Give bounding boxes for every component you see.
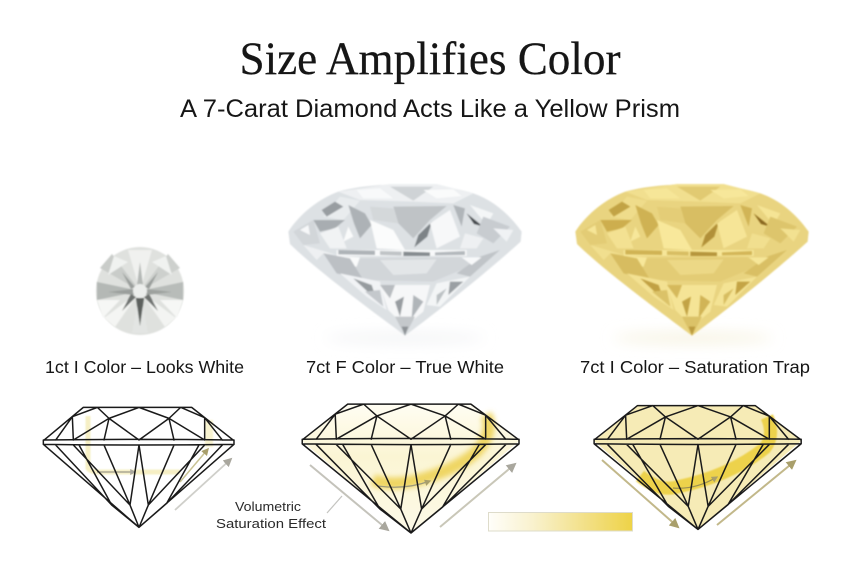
diamond photo: 1ct I color top view — [96, 247, 184, 335]
diagram: 1ct wireframe — [43, 407, 234, 527]
soft shadow: white diamond — [325, 333, 485, 343]
title: Size Amplifies Color — [240, 33, 621, 85]
diagram: 7ct F wireframe — [302, 404, 519, 534]
diamond photo: 7ct I color yellow — [575, 184, 809, 336]
callout: volumetric saturation effect: Volumetric — [235, 500, 301, 514]
diamond photo: 7ct F color — [288, 184, 522, 336]
color gradient bar — [488, 512, 632, 531]
subtitle: A 7-Carat Diamond Acts Like a Yellow Prism — [180, 95, 680, 123]
label: 1ct: 1ct I Color – Looks White — [45, 357, 244, 377]
soft shadow: yellow diamond — [613, 333, 773, 343]
label: 7ct I: 7ct I Color – Saturation Trap — [580, 357, 810, 377]
callout: volumetric saturation effect — [216, 500, 327, 531]
callout: volumetric saturation effect: Saturation Effect — [216, 517, 327, 531]
diagram: 7ct I wireframe — [594, 406, 801, 530]
label: 7ct F: 7ct F Color – True White — [306, 357, 504, 377]
